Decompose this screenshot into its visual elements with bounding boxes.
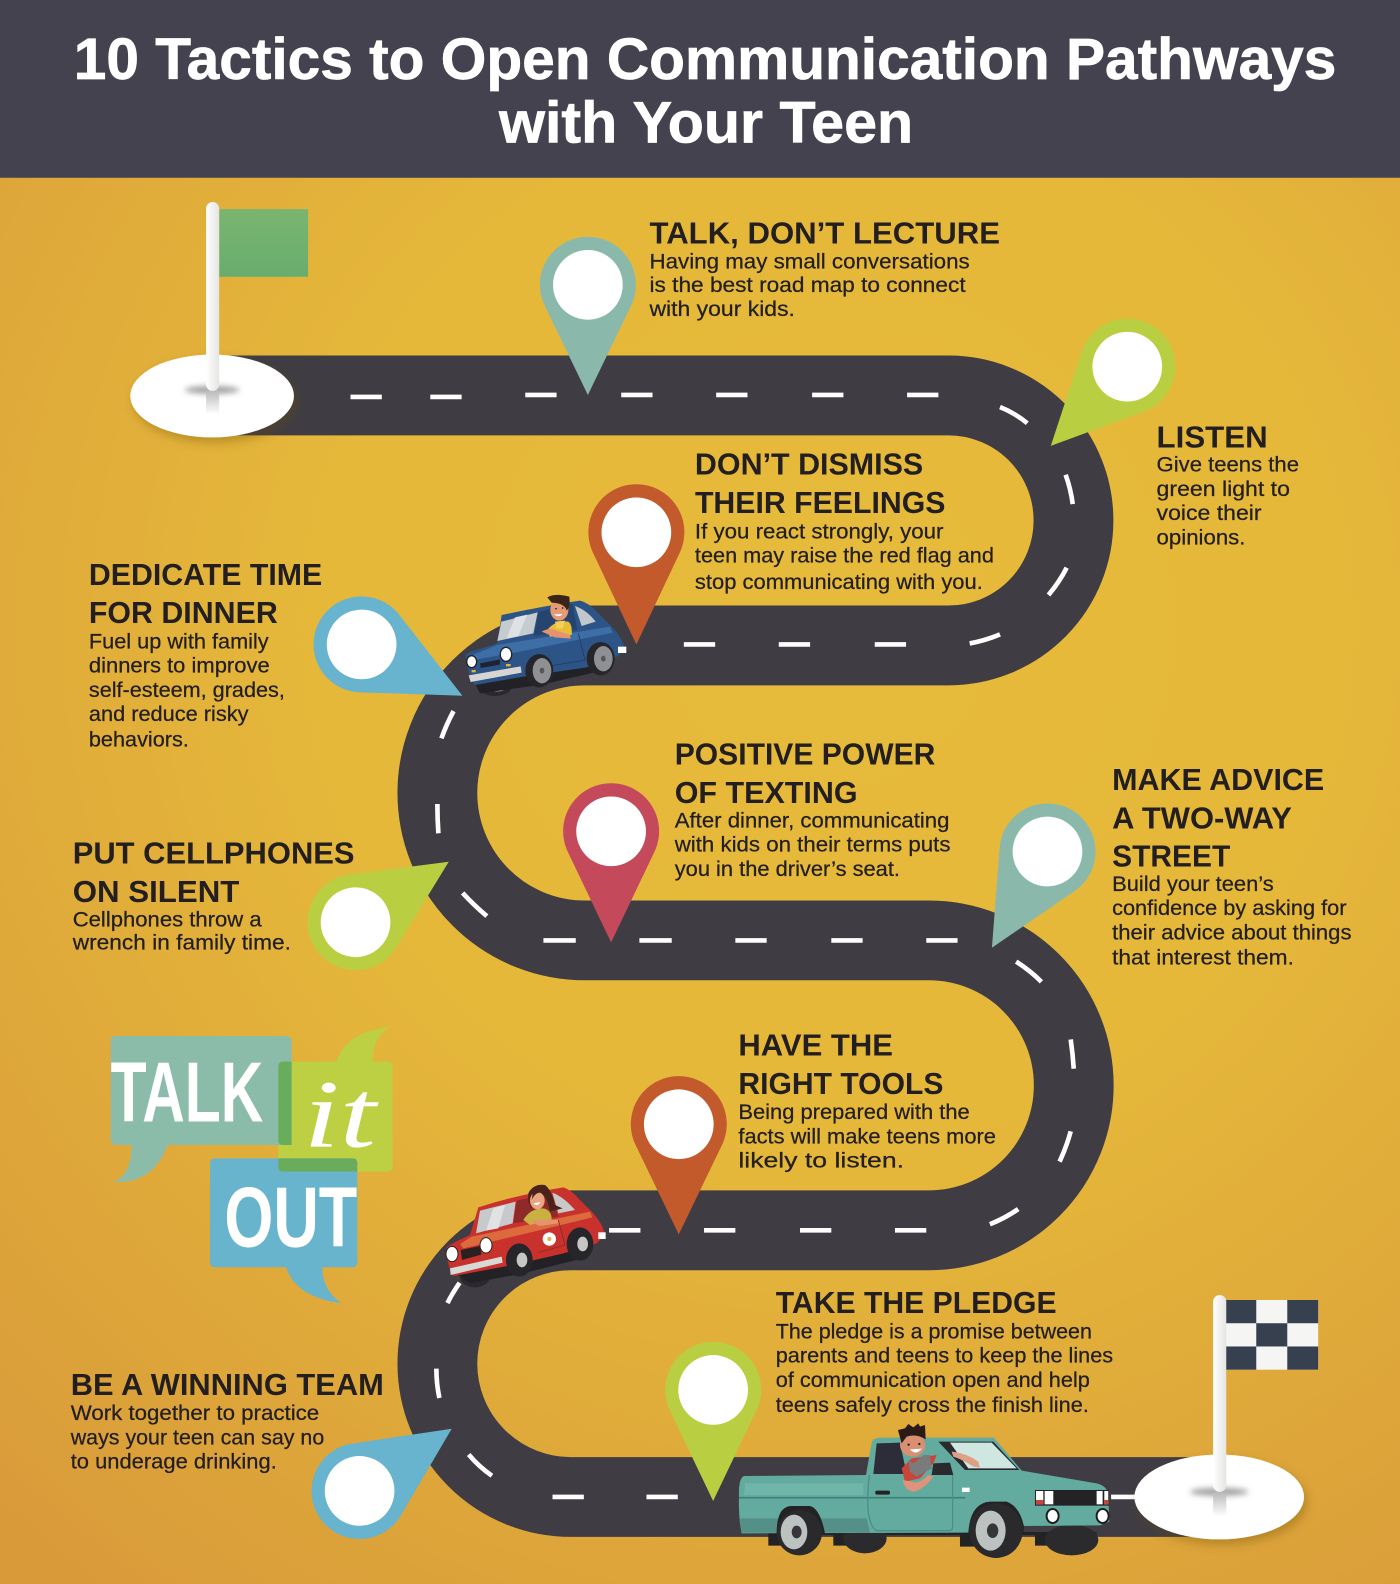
tactic: don't dismiss their feelings: teen may raise the red flag and (695, 545, 994, 568)
tactic: have the right tools: likely to listen. (738, 1150, 904, 1173)
tactic: be a winning team: Work together to practice (71, 1402, 319, 1425)
tactic: listen: voice their (1157, 502, 1262, 525)
tactic: don't dismiss their feelings: stop communicating with you. (695, 571, 983, 594)
tactic: make advice a two-way street (1112, 764, 1352, 970)
tactic: dedicate time for dinner: FOR DINNER (89, 597, 278, 630)
tactic: make advice a two-way street: that interest them. (1112, 947, 1294, 970)
tactic: positive power of texting: with kids on their terms puts (674, 834, 951, 857)
finish flag (1134, 1295, 1318, 1539)
blue car (465, 595, 626, 696)
bubble: talk (111, 1036, 292, 1182)
tactic: don't dismiss their feelings: If you react strongly, your (695, 520, 943, 543)
word: it: it (303, 1061, 379, 1168)
tactic: listen: green light to (1157, 478, 1290, 501)
bubble: out (210, 1158, 357, 1303)
tactic: listen (1157, 421, 1299, 549)
start flag (130, 202, 308, 437)
tactic: take the pledge: teens safely cross the finish line. (776, 1394, 1089, 1417)
tactic: talk, don't lecture: Having may small conversations (649, 251, 970, 274)
tactic: make advice a two-way street: A TWO-WAY (1112, 802, 1292, 835)
tactic: dedicate time for dinner: Fuel up with family (89, 630, 269, 653)
tactic: be a winning team: to underage drinking. (71, 1451, 277, 1474)
pin: listen (1016, 299, 1195, 479)
bubble: it (278, 1027, 393, 1172)
title banner: with Your Teen (498, 90, 913, 155)
tactic: put cellphones on silent: Cellphones throw a (73, 908, 262, 931)
tactic: make advice a two-way street: STREET (1112, 841, 1231, 874)
tactic: don't dismiss their feelings: THEIR FEELINGS (695, 487, 945, 520)
tactic: don't dismiss their feelings (695, 449, 994, 594)
tactic: make advice a two-way street: confidence by asking for (1112, 897, 1346, 920)
title banner (0, 0, 1400, 178)
tactic: listen: Give teens the (1157, 454, 1299, 477)
tactic: dedicate time for dinner (89, 559, 322, 751)
tactic: talk, don't lecture (648, 217, 1000, 321)
pin: dismiss (588, 484, 684, 644)
tactic: positive power of texting: POSITIVE POWER (675, 739, 935, 772)
tactic: positive power of texting: you in the driver’s seat. (675, 858, 900, 881)
tactic: make advice a two-way street: their advice about things (1112, 921, 1352, 944)
tactic: have the right tools (738, 1030, 996, 1173)
tactic: take the pledge (776, 1287, 1113, 1417)
tactic: dedicate time for dinner: behaviors. (89, 728, 189, 751)
tactic: have the right tools: Being prepared with the (738, 1101, 970, 1124)
tactic: be a winning team: ways your teen can say no (70, 1426, 324, 1449)
talk it out logo (111, 1027, 393, 1303)
tactic: put cellphones on silent: PUT CELLPHONES (73, 838, 355, 871)
tactic: talk, don't lecture: with your kids. (648, 298, 795, 321)
tactic: take the pledge: parents and teens to keep the lines (776, 1345, 1113, 1368)
winding road (212, 395, 1219, 1497)
red car (446, 1185, 606, 1287)
tactic: have the right tools: RIGHT TOOLS (738, 1068, 943, 1101)
pin: pledge (665, 1342, 761, 1501)
tactic: make advice a two-way street: Build your teen’s (1112, 873, 1274, 896)
tactic: take the pledge: The pledge is a promise between (776, 1320, 1092, 1343)
word: OUT: OUT (224, 1171, 357, 1266)
overlap tints (278, 1062, 357, 1172)
pin: cellphones (289, 821, 475, 989)
tactic: don't dismiss their feelings: DON’T DISMISS (695, 449, 923, 482)
tactic: have the right tools: HAVE THE (738, 1030, 893, 1063)
tactic: put cellphones on silent: ON SILENT (73, 876, 240, 909)
tactic: positive power of texting (674, 739, 951, 881)
title banner: 10 Tactics to Open Communication Pathways (74, 27, 1336, 92)
tactic: dedicate time for dinner: and reduce risky (89, 703, 249, 726)
tactic: listen: opinions. (1157, 526, 1245, 549)
tactic: make advice a two-way street: MAKE ADVICE (1112, 764, 1324, 797)
tactic: take the pledge: TAKE THE PLEDGE (776, 1287, 1057, 1320)
pickup truck (739, 1423, 1109, 1558)
tactic: take the pledge: of communication open and help (776, 1369, 1090, 1392)
tactic: dedicate time for dinner: self-esteem, grades, (89, 679, 285, 702)
tactic: positive power of texting: OF TEXTING (675, 777, 858, 810)
tactic: dedicate time for dinner: DEDICATE TIME (89, 559, 322, 592)
pin: dinner (297, 580, 484, 739)
tactic: put cellphones on silent: wrench in family time. (72, 931, 291, 954)
tactic: listen: LISTEN (1157, 421, 1268, 454)
word: TALK: TALK (111, 1046, 263, 1141)
tactic: talk, don't lecture: TALK, DON’T LECTURE (649, 217, 1000, 250)
tactic: be a winning team: BE A WINNING TEAM (71, 1369, 384, 1402)
pin: talk (540, 237, 636, 395)
tactic: positive power of texting: After dinner, communicating (675, 809, 949, 832)
pin: advice (950, 786, 1113, 972)
tactic: have the right tools: facts will make teens more (738, 1125, 996, 1148)
pin: tools (631, 1076, 727, 1234)
pin: winning team (293, 1389, 479, 1558)
tactic: put cellphones on silent (72, 838, 355, 954)
tactic: dedicate time for dinner: dinners to improve (89, 655, 270, 678)
pin: texting (563, 783, 659, 942)
tactic: talk, don't lecture: is the best road map to connect (649, 274, 966, 297)
tactic: be a winning team (70, 1369, 384, 1474)
